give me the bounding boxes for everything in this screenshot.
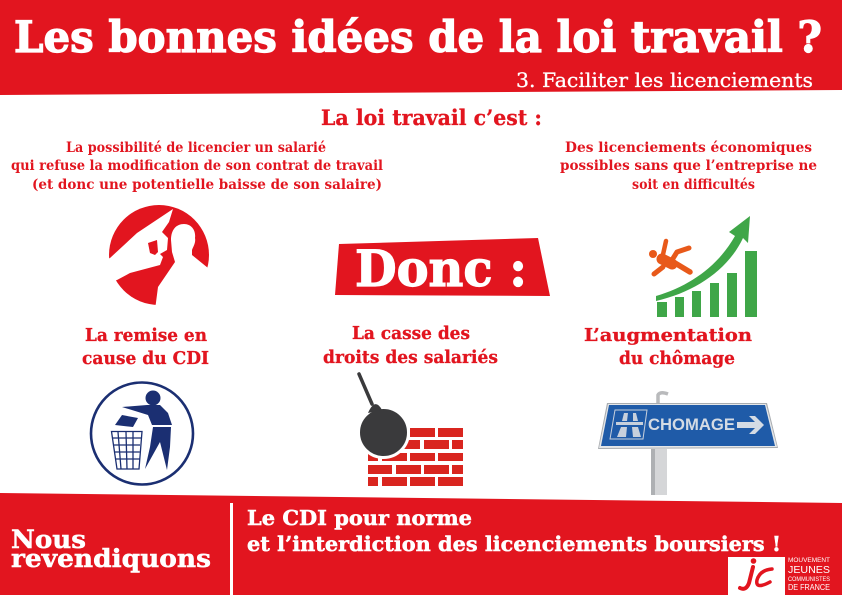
- footer banner: [0, 493, 842, 595]
- label: middle: droits des salariés: [323, 347, 498, 368]
- text block: right argument: possibles sans que l’entreprise ne: [560, 158, 817, 174]
- icon: gun to head: [100, 205, 216, 310]
- wrecking ball: [358, 408, 408, 458]
- motorway pictogram: [610, 410, 647, 439]
- footer heading: Nous: [11, 525, 86, 554]
- footer demand: et l’interdiction des licenciements boursiers !: [247, 532, 781, 556]
- logo: DE FRANCE: [788, 582, 830, 592]
- logo: JEUNES: [788, 564, 830, 576]
- sign arrow: [737, 416, 764, 434]
- label: right: du chômage: [619, 348, 735, 369]
- icon: falling person and rising chart: [649, 216, 757, 317]
- label: right: [584, 325, 752, 369]
- sign text: CHOMAGE: [648, 416, 735, 434]
- label: right: L’augmentation: [584, 325, 752, 346]
- header banner: [0, 0, 842, 95]
- text block: left argument: La possibilité de licencier un salarié: [66, 140, 326, 156]
- bars: [656, 216, 757, 317]
- logo: [728, 557, 830, 595]
- footer demand: [247, 506, 781, 556]
- label: middle: La casse des: [352, 323, 470, 344]
- banner text: Donc :: [355, 239, 527, 298]
- footer heading: revendiquons: [11, 544, 211, 573]
- icon: person throwing into bin: [91, 382, 193, 484]
- sign: [598, 403, 778, 449]
- text block: left argument: qui refuse la modification de son contrat de travail: [11, 158, 383, 174]
- footer heading: [11, 525, 211, 573]
- text block: right argument: Des licenciements économiques: [565, 140, 812, 156]
- logo: MOUVEMENT: [788, 558, 830, 564]
- text block: left argument: [11, 140, 383, 193]
- label: left: La remise en: [85, 325, 207, 346]
- banner: Donc: [335, 238, 550, 298]
- text block: right argument: [560, 140, 817, 193]
- icon: wrecking ball and brick wall: [358, 374, 463, 486]
- pole: [651, 449, 667, 495]
- label: left: cause du CDI: [82, 348, 209, 369]
- text block: right argument: soit en difficultés: [632, 177, 755, 193]
- footer demand: Le CDI pour norme: [247, 506, 472, 530]
- brick wall: [368, 428, 463, 486]
- subtitle: 3. Faciliter les licenciements: [516, 68, 813, 92]
- label: left: [82, 325, 209, 369]
- section heading: La loi travail c’est :: [321, 105, 542, 130]
- title: Les bonnes idées de la loi travail ?: [14, 13, 822, 63]
- icon: road sign CHOMAGE: [598, 393, 778, 495]
- text block: left argument: (et donc une potentielle baisse de son salaire): [32, 177, 382, 193]
- falling person: [649, 241, 690, 274]
- logo: COMMUNISTES: [788, 577, 830, 583]
- label: middle: [323, 323, 498, 368]
- arrow: [656, 216, 750, 301]
